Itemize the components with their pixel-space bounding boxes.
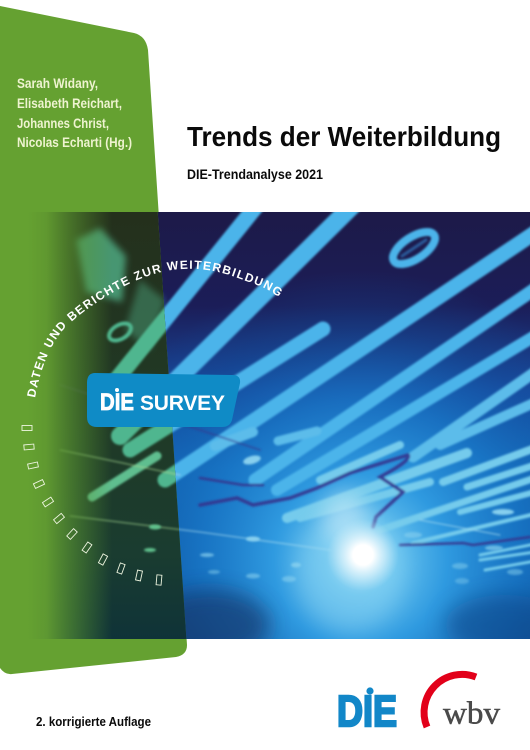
tick marks arc — [22, 426, 162, 585]
panel: green cover band — [0, 6, 187, 674]
logo: DIE: DIE — [337, 687, 397, 736]
logo: wbv — [424, 674, 500, 730]
badge: DIE Survey — [87, 373, 240, 427]
edition note: 2. korrigierte Auflage — [36, 715, 151, 729]
photo: glowing blue data graphic — [158, 212, 530, 639]
arc heading: DATEN UND BERICHTE ZUR WEITERBILDUNG — [27, 260, 282, 398]
authors: Elisabeth Reichart, — [17, 95, 122, 111]
badge: DIE Survey: SURVEY — [140, 392, 225, 415]
logo: wbv: wbv — [443, 694, 500, 730]
authors — [17, 75, 132, 150]
authors: Sarah Widany, — [17, 75, 98, 91]
authors: Johannes Christ, — [17, 115, 109, 131]
badge: DIE Survey: DIE — [100, 389, 134, 416]
subtitle: DIE-Trendanalyse 2021 — [187, 166, 323, 182]
photo inside green band — [45, 212, 186, 639]
title: Trends der Weiterbildung — [187, 121, 501, 152]
authors: Nicolas Echarti (Hg.) — [17, 134, 132, 150]
